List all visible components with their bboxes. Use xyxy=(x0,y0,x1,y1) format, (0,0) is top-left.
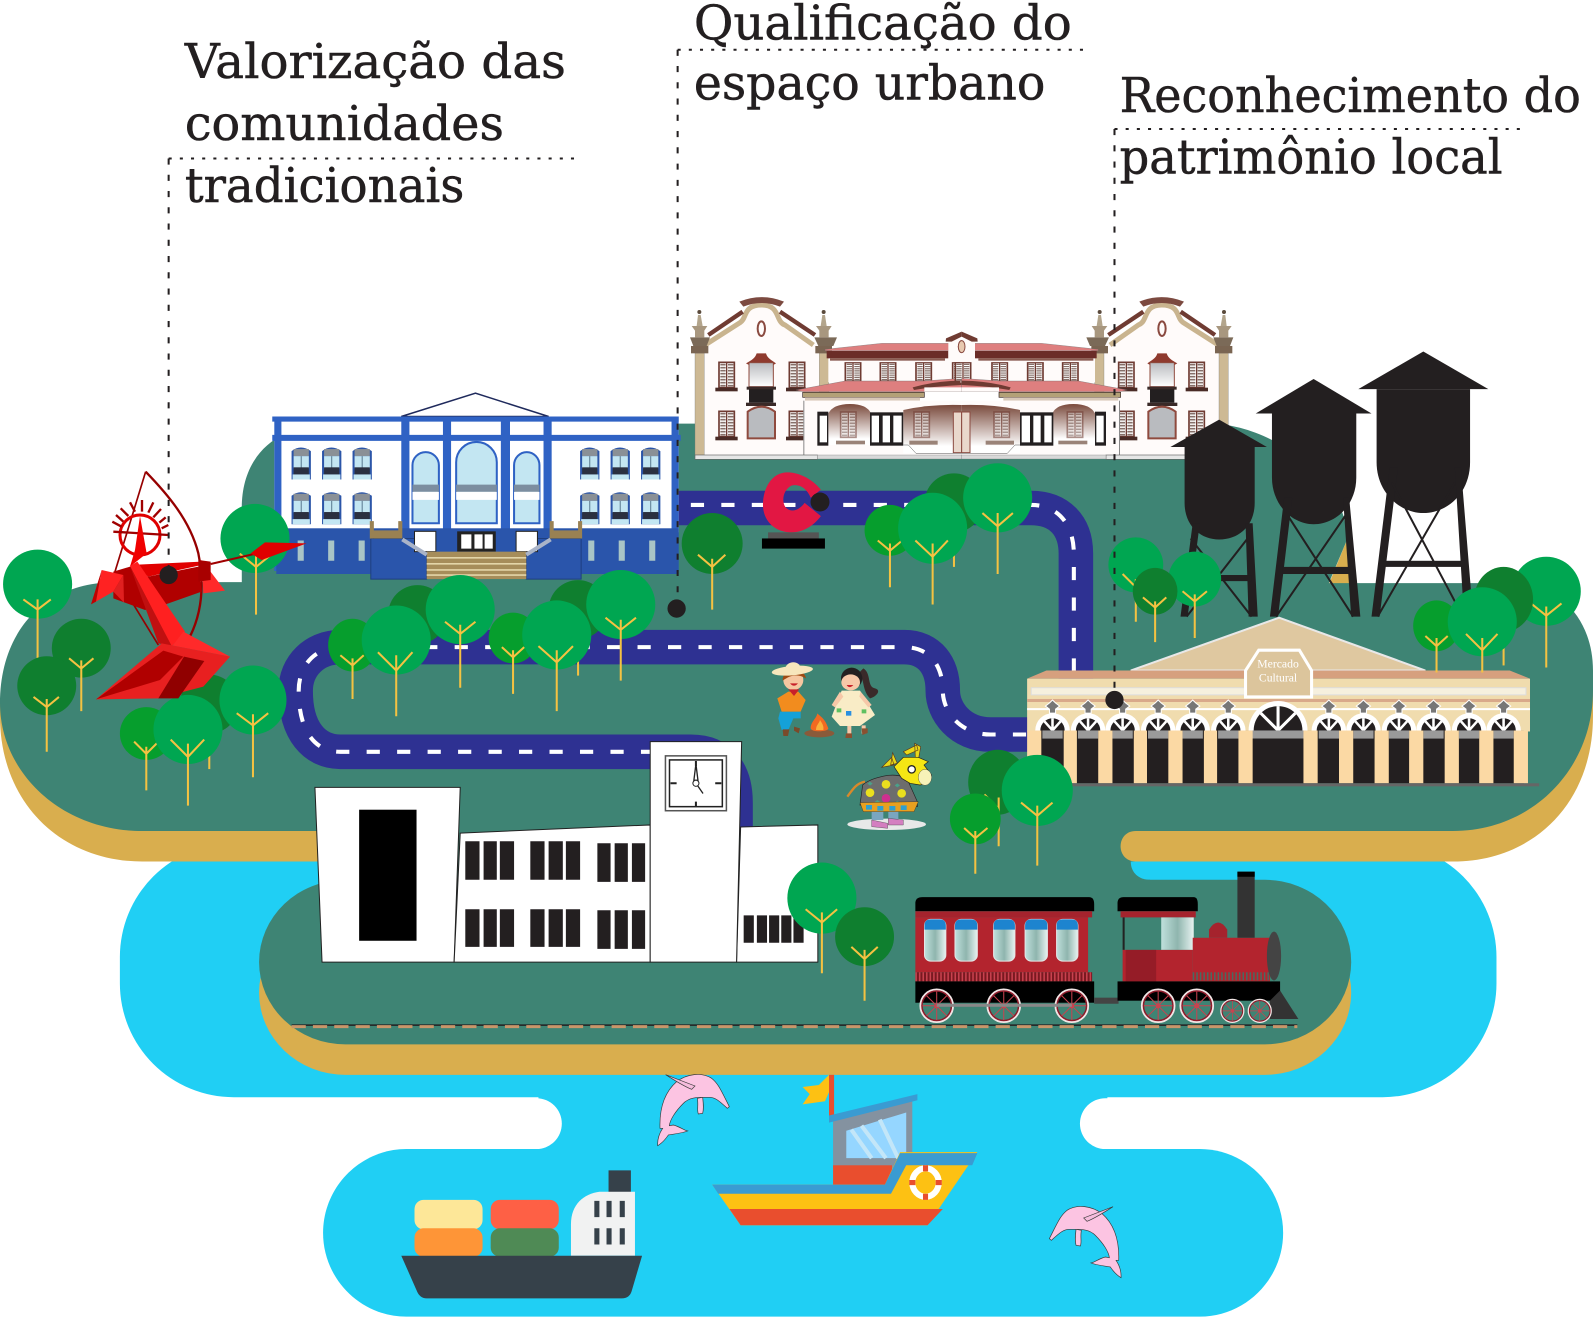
heading: qualificação xyxy=(694,0,1072,112)
terraces xyxy=(370,521,582,538)
arched bays xyxy=(1035,700,1521,739)
lower land sand layer xyxy=(259,910,1351,1075)
sculpture dot xyxy=(810,492,830,512)
window highlights xyxy=(851,1120,898,1158)
sand cap on right side xyxy=(1121,831,1321,862)
land connector xyxy=(323,823,1150,888)
tree group center right xyxy=(489,570,655,711)
heading: reconhecimento xyxy=(1120,69,1581,186)
water towers xyxy=(1170,352,1488,617)
roads xyxy=(296,505,1076,829)
clock tower xyxy=(650,742,742,962)
containers xyxy=(415,1200,559,1257)
tree group right xyxy=(1413,557,1581,673)
staircase xyxy=(402,539,551,579)
crescent xyxy=(763,472,821,532)
sand layer of main land xyxy=(0,681,1593,862)
spots xyxy=(866,780,906,805)
lower water body xyxy=(323,1149,1283,1317)
side entrance blocks xyxy=(371,538,581,579)
archer sculpture xyxy=(91,472,307,699)
cabin roof xyxy=(829,1094,917,1123)
tree group by train xyxy=(787,863,894,1001)
roof band xyxy=(1027,671,1530,679)
lower green land xyxy=(259,880,1351,1044)
sign panel xyxy=(1246,650,1312,697)
dolphin upper xyxy=(658,1074,729,1146)
columns xyxy=(274,417,679,571)
single tree by road xyxy=(682,513,743,610)
bow xyxy=(115,472,202,645)
tree group top xyxy=(865,463,1032,604)
market building: Cultural xyxy=(1259,672,1298,685)
carriage xyxy=(915,897,1094,1022)
arched windows xyxy=(412,442,539,523)
entrance door xyxy=(415,531,537,552)
body xyxy=(860,775,917,807)
cargo ship xyxy=(401,1170,642,1298)
hull xyxy=(712,1152,977,1225)
small base openings xyxy=(298,540,655,561)
sand wedge behind left tree xyxy=(245,567,263,583)
base wedge xyxy=(96,632,230,699)
roof triangle xyxy=(1131,618,1425,671)
windows xyxy=(465,841,645,949)
mansion xyxy=(690,297,1233,459)
windows xyxy=(292,448,660,524)
white bay right xyxy=(1080,1098,1568,1149)
fishing boat xyxy=(712,1075,977,1225)
cabin window xyxy=(846,1112,906,1158)
central arch xyxy=(1249,701,1308,783)
main green land xyxy=(0,424,1593,831)
coupling xyxy=(1094,998,1119,1004)
eye xyxy=(908,766,915,773)
locomotive xyxy=(1118,872,1298,1022)
clock xyxy=(665,756,726,811)
facade wall xyxy=(274,421,679,532)
horns and ribbons xyxy=(882,743,921,767)
pedestal xyxy=(762,532,825,549)
sand sliver behind right tower xyxy=(1329,539,1350,584)
black openings xyxy=(1036,730,1524,783)
heading: valorização: comunidades xyxy=(185,97,504,152)
leader line: urban space xyxy=(667,50,1083,618)
ship cabin xyxy=(571,1192,635,1256)
middle block xyxy=(454,825,650,962)
right half xyxy=(955,297,1233,459)
sun emblem xyxy=(112,500,168,567)
tree group lower left xyxy=(120,665,286,806)
middle road xyxy=(296,647,1036,829)
left half xyxy=(690,297,968,459)
bonfire xyxy=(804,713,834,737)
facade xyxy=(1027,679,1530,731)
leader line: communities xyxy=(160,158,582,584)
blue colonial building xyxy=(272,393,681,579)
water channel xyxy=(538,1092,1107,1155)
cabin windows xyxy=(594,1201,625,1245)
legs and shoes xyxy=(872,812,903,828)
right block xyxy=(737,825,818,962)
trees xyxy=(3,463,1581,1001)
mast xyxy=(829,1075,834,1118)
dolphin lower xyxy=(1049,1206,1121,1278)
torso xyxy=(91,560,225,610)
white bay left xyxy=(102,1098,562,1149)
sign text: Mercado xyxy=(1257,657,1299,670)
base line xyxy=(1057,783,1539,786)
tree group center xyxy=(328,575,495,716)
tower 1 xyxy=(1170,420,1267,617)
children and bonfire xyxy=(771,662,878,738)
small windows xyxy=(744,915,804,943)
pilasters xyxy=(1027,730,1528,783)
hull xyxy=(401,1256,642,1298)
heading: valorização: Valorização das xyxy=(184,35,566,90)
leg xyxy=(130,562,185,647)
heading: reconhecimento: Reconhecimento do xyxy=(1120,69,1581,124)
blue base xyxy=(276,528,679,574)
land and water base xyxy=(0,424,1593,1317)
boy xyxy=(771,662,813,736)
boi-bumbá figure xyxy=(847,743,932,830)
black panel xyxy=(359,810,417,941)
lower white building xyxy=(315,742,818,962)
upper road xyxy=(675,505,1076,681)
pediment xyxy=(401,393,549,417)
heading: qualificação: espaço urbano xyxy=(694,57,1045,112)
track xyxy=(292,1025,1297,1027)
tree group by towers xyxy=(1108,537,1221,642)
entablature bars xyxy=(272,417,681,441)
leader line: heritage xyxy=(1105,129,1524,709)
chimney xyxy=(609,1170,631,1193)
tree group left xyxy=(3,504,290,752)
muzzle xyxy=(918,769,932,785)
tree group bottom center xyxy=(950,750,1073,874)
heading: valorização: tradicionais xyxy=(185,159,464,214)
market building xyxy=(1027,618,1539,786)
head xyxy=(894,757,932,785)
left block xyxy=(315,787,460,962)
flag xyxy=(803,1075,829,1104)
cabin xyxy=(833,1098,912,1168)
life ring xyxy=(909,1165,942,1200)
cornice strips xyxy=(1031,688,1526,695)
cabin lower xyxy=(833,1165,892,1186)
tower 3 xyxy=(1358,352,1488,617)
fringe xyxy=(860,802,918,812)
upper water body xyxy=(120,843,1496,1097)
red sculpture xyxy=(762,472,825,549)
girl xyxy=(832,668,878,738)
train xyxy=(292,872,1298,1027)
heading: reconhecimento: patrimônio local xyxy=(1120,131,1503,186)
tower 2 xyxy=(1256,379,1372,617)
shadow xyxy=(847,819,926,830)
arrow xyxy=(211,542,307,564)
heading: valorização xyxy=(184,35,566,214)
tail xyxy=(847,782,865,797)
